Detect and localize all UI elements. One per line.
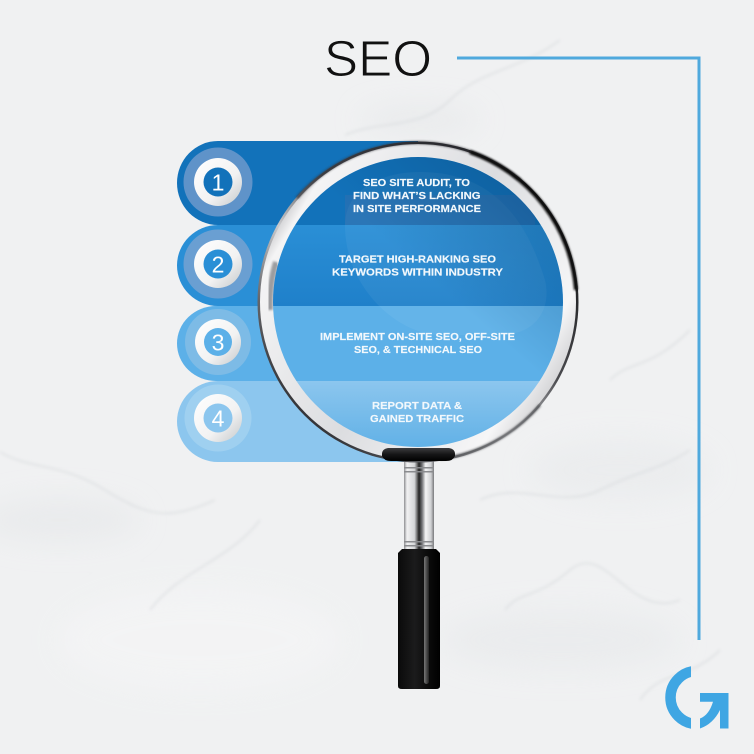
step 3 text: IMPLEMENT ON-SITE SEO, OFF-SITE (320, 332, 515, 343)
step 2 text: KEYWORDS WITHIN INDUSTRY (332, 268, 503, 278)
step 4 text: REPORT DATA & (372, 401, 462, 412)
badge 4: 4 (212, 406, 225, 432)
connector line (457, 58, 699, 640)
step 3 text (320, 332, 515, 356)
badge 1: 1 (212, 170, 224, 196)
step 2 text: TARGET HIGH-RANKING SEO (339, 254, 496, 266)
magnifier handle (398, 461, 440, 689)
badge 3: 3 (212, 330, 224, 356)
badge 4 (184, 384, 252, 452)
step 3 text: SEO, & TECHNICAL SEO (354, 345, 482, 356)
step 4 text: GAINED TRAFFIC (370, 414, 464, 425)
handle collar (382, 448, 455, 461)
step 1 text: IN SITE PERFORMANCE (353, 204, 481, 215)
badge 2 (184, 230, 252, 298)
badge 3 (185, 309, 251, 375)
badge 1 (184, 148, 252, 216)
step 1 text (353, 178, 481, 215)
step bars (177, 141, 418, 462)
logo (670, 671, 728, 728)
magnifier lens (270, 155, 570, 451)
title: SEO (324, 30, 432, 87)
magnifier rim (258, 142, 578, 462)
badge 2: 2 (212, 252, 224, 278)
step 2 text (332, 254, 503, 278)
step 1 text: SEO SITE AUDIT, TO (363, 178, 470, 189)
step 1 text: FIND WHAT’S LACKING (353, 191, 481, 202)
step 4 text (370, 401, 464, 425)
